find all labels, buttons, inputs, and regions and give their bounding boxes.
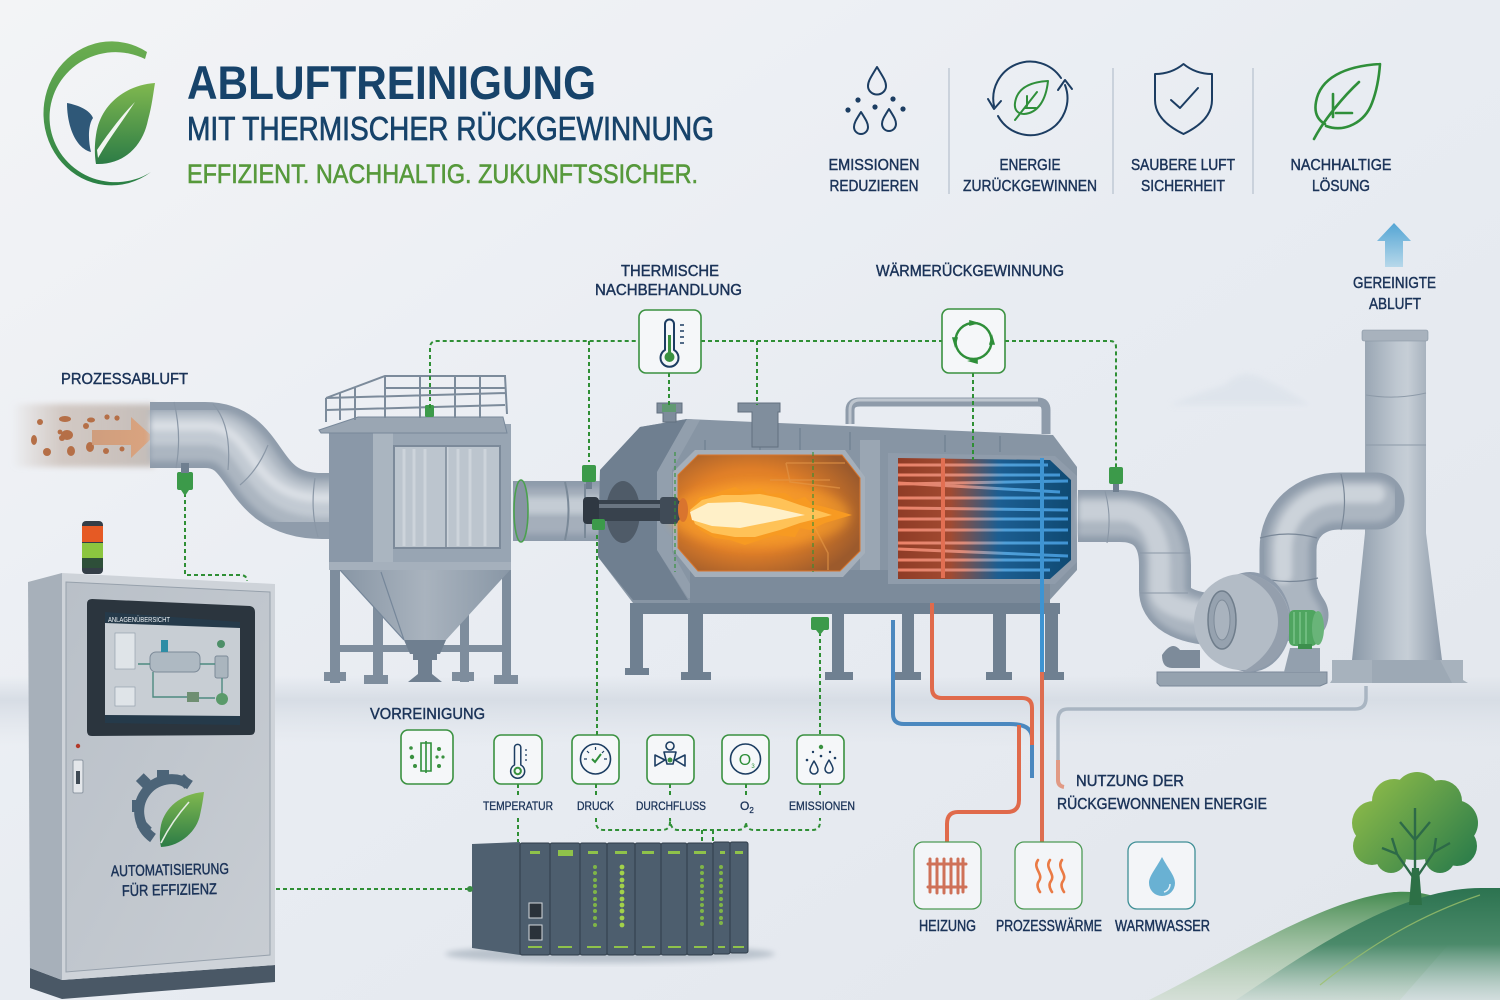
benefit: emissions: REDUZIEREN — [830, 178, 918, 195]
sensor burner — [592, 519, 605, 530]
gear with leaf — [132, 770, 204, 847]
radiator icon — [928, 859, 966, 893]
heat waves — [1036, 860, 1064, 892]
benefit: energy — [963, 62, 1097, 195]
outlet duct to stack — [1260, 474, 1376, 615]
use: process heat — [996, 842, 1102, 935]
screen — [87, 599, 255, 736]
pump — [1162, 646, 1200, 668]
tree branches — [1382, 808, 1450, 905]
duct: filter to combustor — [513, 480, 613, 542]
body — [329, 432, 511, 570]
stack — [1330, 330, 1468, 683]
door panel — [394, 446, 500, 548]
dashed control lines — [185, 341, 1116, 889]
logo large leaf — [95, 83, 155, 164]
fan unit — [1157, 474, 1376, 686]
cap — [1362, 330, 1428, 341]
grey return line — [1058, 686, 1366, 760]
label: WARMWASSER — [1115, 918, 1210, 935]
subheading: MIT THERMISCHER RÜCKGEWINNUNG — [187, 110, 714, 147]
PLC modules — [520, 842, 748, 955]
duct: inlet to filter — [150, 402, 362, 544]
sensors — [177, 463, 1123, 635]
label: ENERGIE — [1000, 157, 1060, 174]
outlet — [404, 640, 446, 682]
particles — [31, 414, 124, 456]
thermal treatment label: THERMISCHE — [621, 263, 719, 280]
dark hill — [1236, 888, 1500, 1000]
railing — [326, 376, 507, 422]
title block — [187, 56, 714, 189]
process exhaust stream — [12, 404, 154, 467]
heat recovery icon — [942, 309, 1005, 373]
cleaned air label: GEREINIGTE — [1353, 275, 1436, 292]
label: DURCHFLUSS — [636, 799, 706, 813]
return tip — [1058, 760, 1064, 787]
label: PROZESSWÄRME — [996, 918, 1102, 935]
process exhaust label: PROZESSABLUFT — [61, 371, 189, 388]
screen schematic — [115, 633, 228, 706]
shaft — [1352, 340, 1442, 660]
benefit: sustainable: LÖSUNG — [1312, 177, 1370, 195]
burner — [583, 481, 688, 543]
thermal treatment label: NACHBEHANDLUNG — [595, 282, 742, 299]
screen title: ANLAGENÜBERSICHT — [108, 616, 171, 624]
benefit: sustainable — [1290, 64, 1392, 195]
volute — [1209, 572, 1291, 672]
combustor and heat exchanger — [583, 400, 1077, 680]
burner chamber window — [670, 450, 865, 577]
port 1 — [657, 403, 682, 422]
sensor: pressure — [572, 735, 619, 813]
energy use label: NUTZUNG DER — [1076, 773, 1184, 790]
duct: exchanger to fan — [1078, 491, 1225, 620]
sensor: emissions — [789, 735, 855, 813]
cleaned air label: ABLUFT — [1369, 296, 1421, 313]
motor — [1289, 610, 1324, 649]
energy use label — [1057, 773, 1267, 813]
PLC LEDs — [593, 865, 723, 927]
sensor: oxygen — [722, 735, 769, 815]
label: TEMPERATUR — [483, 799, 553, 813]
blue vertical — [1040, 458, 1044, 675]
sensor — [425, 405, 434, 417]
flame — [670, 483, 852, 547]
label: EMISSIONEN — [828, 157, 920, 174]
legs — [324, 565, 518, 684]
use: heating — [914, 842, 981, 935]
PLC display labels — [528, 850, 744, 948]
PLC ports — [529, 903, 542, 940]
cabinet text: AUTOMATISIERUNG — [111, 861, 229, 880]
sensor connector duct — [582, 465, 596, 489]
red line heating — [932, 603, 1032, 842]
label: NACHHALTIGE — [1290, 157, 1392, 174]
label: DRUCK — [577, 799, 614, 813]
sensor inlet duct — [177, 463, 193, 496]
icon: filter sensor — [401, 730, 453, 784]
benefit: clean air: SICHERHEIT — [1141, 178, 1225, 195]
heat exchanger window — [888, 453, 1077, 584]
icon: droplets — [846, 67, 905, 134]
use: hot water — [1115, 842, 1210, 935]
motor stand — [1284, 648, 1320, 672]
port 2 — [738, 403, 780, 447]
logo — [43, 41, 155, 185]
control cabinet — [28, 521, 275, 999]
utility pipes — [893, 458, 1366, 842]
signal tower — [82, 521, 103, 574]
handle — [73, 760, 83, 793]
filter unit: pre-cleaning — [319, 376, 518, 684]
hopper — [340, 570, 510, 640]
cleaned air label — [1353, 275, 1436, 313]
landscape — [1149, 772, 1500, 1000]
sensor: temperature — [483, 735, 553, 813]
plinth — [30, 965, 275, 999]
sensor: oxygen: 3 — [751, 764, 755, 770]
icon: recycle leaf — [988, 62, 1072, 135]
legs — [625, 603, 1064, 680]
tagline: EFFIZIENT. NACHHALTIG. ZUKUNFTSSICHER. — [187, 159, 698, 189]
pre-cleaning label: VORREINIGUNG — [370, 706, 485, 723]
label: O — [740, 799, 749, 813]
energy use label: RÜCKGEWONNENEN ENERGIE — [1057, 795, 1267, 813]
benefit: energy: ZURÜCKGEWINNEN — [963, 177, 1097, 195]
sensor: oxygen: O — [739, 752, 751, 769]
tree — [1352, 772, 1478, 905]
sensor combustor bottom — [811, 617, 829, 635]
label: EMISSIONEN — [789, 799, 855, 813]
icon: leaf — [1314, 64, 1380, 139]
sensor outlet — [1109, 467, 1123, 492]
base — [1157, 672, 1327, 686]
icon: shield — [1155, 64, 1212, 134]
side — [28, 573, 62, 980]
label: 2 — [749, 806, 754, 815]
front — [62, 573, 275, 980]
label: SAUBERE LUFT — [1131, 157, 1235, 174]
lamp — [76, 744, 80, 748]
water drop — [1149, 857, 1175, 896]
blue line — [893, 620, 1032, 778]
logo ring — [43, 41, 151, 185]
control cabinet: FÜR EFFIZIENZ — [122, 880, 217, 900]
base — [1330, 660, 1468, 683]
arrow — [92, 417, 153, 458]
heat recovery label: WÄRMERÜCKGEWINNUNG — [876, 262, 1064, 280]
fan inlet ring — [1208, 591, 1236, 649]
label: HEIZUNG — [919, 918, 976, 935]
benefit: emissions — [828, 67, 920, 195]
tree crown — [1352, 772, 1478, 873]
sensor: flow — [636, 735, 706, 813]
body shell — [598, 419, 1077, 603]
light hill — [1149, 892, 1470, 1000]
PLC controller — [445, 842, 775, 963]
cleaned air arrow — [1377, 223, 1411, 267]
roof — [319, 417, 507, 433]
logo small leaf — [67, 103, 93, 152]
main heading: ABLUFTREINIGUNG — [187, 56, 596, 109]
PLC side — [472, 842, 520, 955]
top pipe — [850, 402, 1046, 434]
thermal treatment label — [595, 263, 742, 299]
red vertical process heat — [1040, 672, 1044, 842]
thermal treatment icon — [639, 310, 701, 373]
benefit: clean air — [1131, 64, 1235, 195]
